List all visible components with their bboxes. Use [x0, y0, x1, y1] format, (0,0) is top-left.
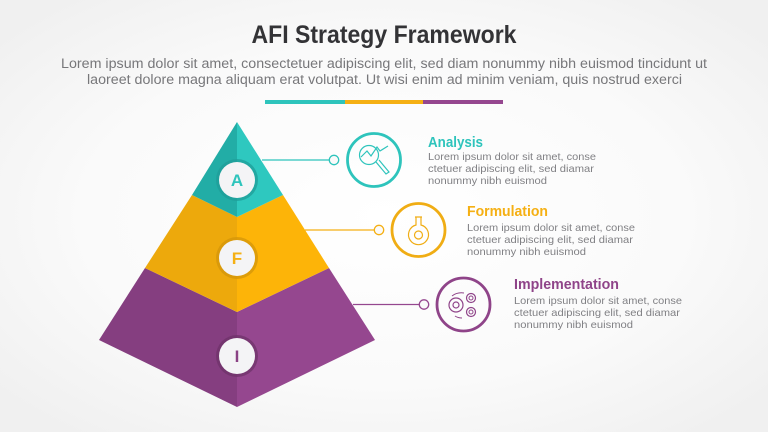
badge: F: F: [232, 249, 242, 268]
text: formulation: [467, 203, 635, 258]
subtitle: laoreet dolore magna aliquam erat volutpat. Ut wisi enim ad minim veniam, quis nostrud exerci: [87, 72, 682, 87]
pyramid layer: formulation: [145, 195, 329, 312]
text: analysis: [428, 134, 596, 187]
connector: implementation: [353, 300, 429, 309]
text: analysis: ctetuer adipiscing elit, sed diamar: [428, 163, 595, 175]
subtitle: [61, 56, 707, 87]
text: implementation: ctetuer adipiscing elit, sed diamar: [514, 307, 681, 319]
connector: formulation: [305, 225, 384, 235]
pyramid: [99, 122, 375, 407]
badge: A: [216, 159, 258, 201]
text: analysis: Analysis: [428, 134, 483, 151]
text: analysis: nonummy nibh euismod: [428, 175, 547, 187]
icon: formulation flask: [392, 204, 445, 256]
badge: F: [216, 237, 258, 279]
pyramid layer: implementation: [99, 268, 375, 407]
connector: analysis: [262, 155, 339, 165]
text: implementation: Lorem ipsum dolor sit amet, conse: [514, 295, 682, 307]
pyramid layer: analysis: [192, 122, 283, 217]
text: analysis: Lorem ipsum dolor sit amet, conse: [428, 151, 596, 163]
icon: analysis magnifier: [348, 134, 400, 186]
text: formulation: ctetuer adipiscing elit, sed diamar: [467, 234, 634, 246]
subtitle: Lorem ipsum dolor sit amet, consectetuer adipiscing elit, sed diam nonummy nibh euismod tincidunt ut: [61, 56, 707, 71]
text: implementation: nonummy nibh euismod: [514, 319, 633, 331]
tri-colour divider: [265, 100, 503, 104]
badge: A: A: [231, 171, 243, 190]
title: AFI Strategy Framework: [252, 21, 517, 49]
icon: implementation gears: [437, 278, 490, 331]
text: formulation: Lorem ipsum dolor sit amet, conse: [467, 222, 635, 234]
text: formulation: nonummy nibh euismod: [467, 246, 586, 258]
text: implementation: Implementation: [514, 276, 619, 293]
text: formulation: Formulation: [467, 203, 548, 220]
text: implementation: [514, 276, 682, 331]
badge: I: I: [235, 347, 239, 366]
badge: I: [216, 335, 258, 377]
